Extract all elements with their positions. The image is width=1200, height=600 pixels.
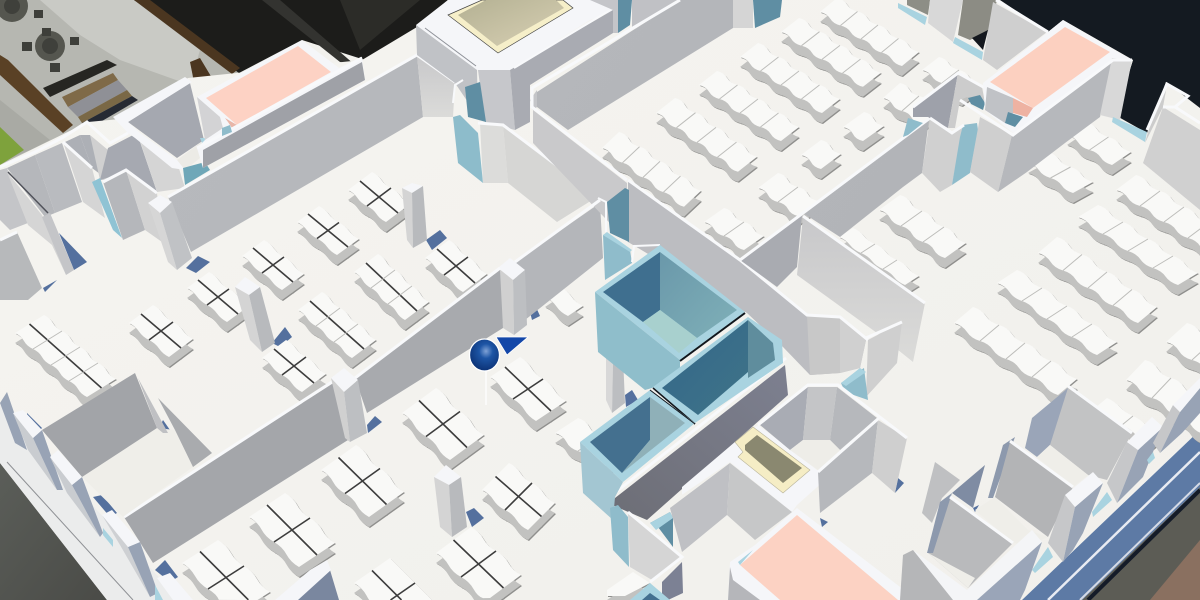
desks: upper right hall xyxy=(601,0,980,251)
desks: upper left hall xyxy=(14,171,584,398)
blue room three xyxy=(580,390,695,520)
pillar, upper left xyxy=(148,195,192,270)
grey wall beside blue rooms xyxy=(612,358,788,520)
free-standing columns xyxy=(235,183,467,537)
blue room two xyxy=(653,317,783,424)
octagonal room, lower centre xyxy=(758,385,907,513)
dark roof xyxy=(134,0,448,74)
pink panel, bottom centre xyxy=(728,508,917,600)
small blue doors, lower centre xyxy=(610,505,673,567)
desk block clipped by bottom edge, centre xyxy=(435,526,522,600)
dividing wall, centre xyxy=(515,0,782,320)
pillar, mid-wall left xyxy=(498,258,527,335)
neighbouring lobby, top left xyxy=(0,0,240,180)
desk block clipped by bottom edge, mid xyxy=(353,558,432,600)
ground, bottom left xyxy=(0,463,107,600)
white slab around cream shaft xyxy=(667,425,825,512)
desk block clipped by bottom edge, left xyxy=(181,539,271,600)
doors: centre xyxy=(598,188,660,280)
octagonal skylight block, top centre xyxy=(416,0,640,130)
long wall, upper left hall xyxy=(168,55,455,252)
wall end, bottom left xyxy=(275,560,339,600)
pillar base shadows xyxy=(27,230,979,582)
top wall and windows, upper right xyxy=(898,0,1048,70)
building ledge, bottom left xyxy=(0,405,180,600)
edge pillars, lower left xyxy=(0,392,193,600)
heading arrow xyxy=(496,337,528,355)
pink panel, top left xyxy=(197,40,365,168)
rooms, lower centre-right xyxy=(900,462,1042,600)
pin stem xyxy=(485,368,487,405)
cluster of walls, far left xyxy=(0,122,162,300)
desks: lower left hall xyxy=(181,356,650,600)
small wall block, lower centre xyxy=(628,512,683,600)
night sky, top right xyxy=(996,0,1200,135)
column beside blue rooms xyxy=(606,348,625,413)
doors and back wall: top centre xyxy=(453,0,680,183)
pink panel, top right xyxy=(960,20,1132,192)
back room behind pink panel, left xyxy=(113,77,210,192)
inner lobby, upper right xyxy=(903,73,985,192)
wall corner, right of centre door xyxy=(478,123,600,222)
green lawn patches xyxy=(0,127,24,232)
door and wall, central hall xyxy=(841,322,902,400)
pillars, right edge xyxy=(1032,378,1200,573)
blue room one xyxy=(595,245,745,390)
long wall, lower left hall xyxy=(124,268,503,563)
short wall, central hall xyxy=(740,118,930,362)
desks: lower right hall xyxy=(838,121,1200,444)
location pin xyxy=(470,339,500,405)
pillar wall and window, right edge xyxy=(1112,84,1200,210)
pillar, mid-wall right xyxy=(331,368,367,442)
cream shaft xyxy=(735,427,810,493)
room below cream shaft xyxy=(670,463,792,552)
building edge band, bottom right xyxy=(1022,430,1200,600)
street, bottom right xyxy=(1082,487,1200,600)
diagonal wall running to blue rooms xyxy=(628,180,868,375)
small room, lower left xyxy=(42,373,212,517)
pin ball xyxy=(470,339,500,371)
lower right rooms xyxy=(975,386,1132,545)
